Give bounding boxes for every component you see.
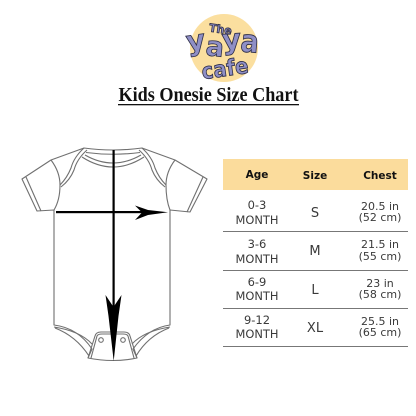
row 0-3 month — [236, 198, 401, 227]
logo: The Yaya Cafe: y — [184, 23, 208, 58]
row 0-3 month: S — [311, 206, 319, 221]
row 9-12 month: 9-12 — [244, 313, 270, 327]
row 0-3 month: 0-3 — [248, 198, 266, 212]
collar — [82, 152, 144, 167]
table header: Size — [303, 170, 327, 182]
row 9-12 month: XL — [307, 321, 324, 336]
row 9-12 month: MONTH — [236, 327, 278, 341]
row 9-12 month: (65 cm) — [359, 326, 401, 339]
logo: The Yaya Cafe: a — [204, 31, 226, 64]
row 6-9 month: 23 in — [366, 277, 394, 290]
vertical length arrow — [106, 150, 122, 361]
leg openings — [54, 327, 170, 356]
logo: The Yaya Cafe: y — [221, 22, 242, 56]
size table — [223, 159, 408, 347]
table header: Chest — [363, 170, 397, 182]
row 3-6 month: MONTH — [236, 252, 278, 266]
row 6-9 month: (58 cm) — [359, 288, 401, 301]
row 6-9 month — [236, 275, 401, 303]
snaps — [99, 338, 103, 342]
armhole seams — [51, 160, 175, 210]
logo: The Yaya Cafe — [184, 14, 261, 84]
logo: The Yaya Cafe: a — [239, 23, 261, 60]
table header: Age — [246, 169, 268, 181]
table header — [223, 159, 408, 190]
row 6-9 month: MONTH — [236, 289, 278, 303]
row 6-9 month: 6-9 — [248, 275, 266, 289]
row 0-3 month: (52 cm) — [359, 211, 401, 224]
snap flap — [88, 332, 137, 358]
body outline — [22, 148, 207, 360]
sleeve cuffs — [26, 177, 203, 212]
onesie diagram — [22, 148, 207, 360]
logo: The Yaya Cafe: cafe — [200, 52, 250, 84]
title: Kids Onesie Size Chart — [118, 84, 299, 106]
row 3-6 month — [236, 237, 401, 266]
row 9-12 month — [236, 313, 401, 341]
row 3-6 month: 21.5 in — [361, 238, 399, 251]
row 3-6 month: M — [309, 244, 321, 259]
row 3-6 month: (55 cm) — [359, 250, 401, 263]
left raglan seam — [60, 148, 87, 187]
logo: The Yaya Cafe: The — [208, 22, 233, 38]
row 9-12 month: 25.5 in — [361, 315, 399, 328]
row 0-3 month: 20.5 in — [361, 200, 399, 213]
row 6-9 month: L — [311, 283, 319, 298]
row 3-6 month: 3-6 — [248, 237, 266, 251]
horizontal chest arrow — [56, 206, 168, 220]
right raglan seam — [139, 148, 166, 187]
row 0-3 month: MONTH — [236, 213, 278, 227]
